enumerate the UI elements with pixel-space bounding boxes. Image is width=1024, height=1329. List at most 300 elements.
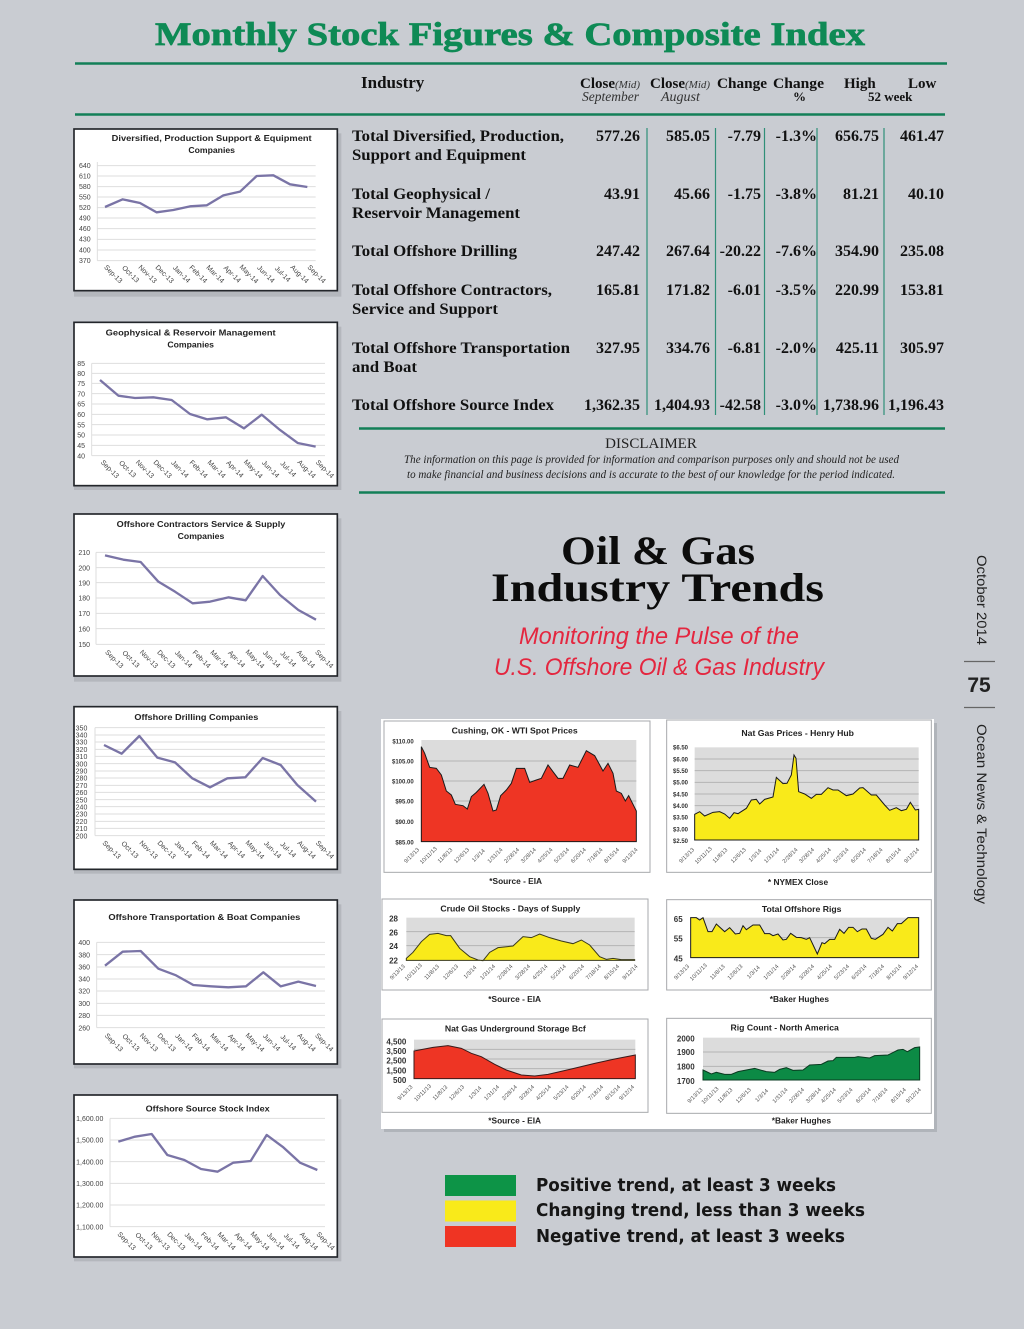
panel: offshore drilling chart: 280 <box>76 776 87 783</box>
chart: natural gas underground storage: 4,500 <box>386 1038 407 1047</box>
panel: geophysical chart: Nov-13 <box>134 459 155 480</box>
panel: diversified chart: 610 <box>79 174 91 181</box>
chart: Henry Hub natural gas prices: * NYMEX Close <box>768 877 828 887</box>
panel: diversified chart: Nov-13 <box>137 264 158 285</box>
chart: total offshore rigs: *Baker Hughes <box>770 994 829 1004</box>
panel: offshore source stock index chart: Jun-14 <box>265 1232 285 1252</box>
table row: transportation: 334.76 <box>666 340 710 357</box>
chart: total offshore rigs: 7/18/14 <box>868 964 886 981</box>
panel: offshore transportation chart: 380 <box>78 952 90 959</box>
panel: geophysical chart: 75 <box>77 381 85 388</box>
table row: transportation: and Boat <box>352 359 418 376</box>
chart: total offshore rigs: 1/31/14 <box>763 964 780 981</box>
chart: natural gas underground storage: 3/28/14 <box>518 1084 536 1102</box>
panel: offshore drilling chart: 220 <box>76 819 87 826</box>
chart: WTI spot prices: *Source - EIA <box>489 876 542 886</box>
chart: Henry Hub natural gas prices: 1/31/14 <box>763 847 781 865</box>
panel: offshore source stock index chart: Sep-14 <box>315 1231 336 1252</box>
panel: offshore drilling chart: Sep-14 <box>314 840 335 861</box>
panel: geophysical chart: 65 <box>77 402 85 409</box>
legend: Positive trend, at least 3 weeks <box>536 1175 836 1196</box>
chart: total offshore rigs: 1/3/14 <box>746 965 762 980</box>
chart: total offshore rigs: 3/28/14 <box>798 964 816 981</box>
chart: Henry Hub natural gas prices: 12/6/13 <box>730 847 748 865</box>
panel: geophysical chart: 45 <box>77 443 85 450</box>
panel: offshore source stock index chart: Apr-14 <box>233 1232 253 1252</box>
chart: Henry Hub natural gas prices: 9/13/13 <box>678 847 696 865</box>
table row: contractors: 171.82 <box>666 282 710 299</box>
chart: crude oil stocks: 4/25/14 <box>532 964 549 981</box>
chart: natural gas underground storage: 4/25/14 <box>535 1084 553 1102</box>
chart: WTI spot prices: 8/15/14 <box>603 847 621 865</box>
chart: total offshore rigs: 5/23/14 <box>833 964 851 981</box>
panel: offshore transportation chart: 340 <box>78 977 90 984</box>
panel: offshore transportation chart: 280 <box>78 1013 90 1020</box>
panel: offshore source stock index chart: 1,500.00 <box>76 1138 103 1145</box>
chart: natural gas underground storage: 8/15/14 <box>604 1084 622 1102</box>
panel: offshore transportation chart: Jul-14 <box>279 1034 297 1052</box>
chart: crude oil stocks: 7/18/14 <box>585 964 603 981</box>
chart: crude oil stocks <box>382 899 648 1004</box>
chart: natural gas underground storage: Nat Gas Underground Storage Bcf <box>445 1023 586 1033</box>
panel: offshore drilling chart: Mar-14 <box>208 840 229 861</box>
chart: Henry Hub natural gas prices: 9/12/14 <box>903 847 921 865</box>
panel: offshore transportation chart: Jun-14 <box>261 1033 281 1053</box>
panel: geophysical chart: Sep-13 <box>99 459 120 480</box>
table row: geophysical <box>352 186 944 222</box>
panel: offshore contractors chart: 170 <box>78 611 90 618</box>
chart: Henry Hub natural gas prices: $4.50 <box>673 792 689 798</box>
table row: diversified: Total Diversified, Production, <box>352 128 564 145</box>
panel: offshore transportation chart: Apr-14 <box>226 1033 246 1053</box>
panel: geophysical chart: Dec-13 <box>152 459 173 480</box>
chart: rig count North America: 4/25/14 <box>820 1087 838 1105</box>
chart: natural gas underground storage: 3,500 <box>386 1047 407 1056</box>
panel: trend charts background <box>381 719 937 1132</box>
chart: Henry Hub natural gas prices: $6.50 <box>673 746 689 752</box>
chart: Henry Hub natural gas prices: 6/20/14 <box>850 847 868 865</box>
panel: offshore drilling chart: 210 <box>76 826 87 833</box>
panel: offshore drilling chart: Jul-14 <box>279 841 297 860</box>
table row: geophysical: 40.10 <box>908 186 944 203</box>
chart: crude oil stocks: 10/11/13 <box>404 963 424 982</box>
chart: WTI spot prices: 9/13/13 <box>403 847 421 865</box>
chart: crude oil stocks: 9/12/14 <box>622 964 639 981</box>
chart: Henry Hub natural gas prices: 4/25/14 <box>815 847 833 865</box>
chart: rig count North America: 1/31/14 <box>772 1087 789 1105</box>
chart: rig count North America: 7/18/14 <box>872 1087 889 1105</box>
chart: natural gas underground storage: *Source - EIA <box>488 1116 541 1126</box>
panel: offshore contractors chart: Companies <box>178 531 225 541</box>
chart: total offshore rigs <box>667 900 931 1004</box>
table row: contractors: -3.5% <box>776 282 817 299</box>
panel: offshore source stock index chart: 1,600.00 <box>76 1116 103 1123</box>
chart: natural gas underground storage: 1,500 <box>386 1066 407 1075</box>
panel: diversified chart: May-14 <box>238 264 259 285</box>
panel: offshore contractors chart: Sep-13 <box>103 649 124 670</box>
heading: Oil & Gas Industry Trends: Oil & Gas <box>561 528 755 573</box>
chart: total offshore rigs: 10/11/13 <box>689 963 709 982</box>
chart: rig count North America: 9/12/14 <box>905 1087 923 1105</box>
chart: Henry Hub natural gas prices: $4.00 <box>673 804 689 810</box>
heading: Oil & Gas Industry Trends <box>491 528 824 610</box>
panel: offshore contractors chart: Sep-14 <box>313 649 334 670</box>
table row: drilling: -7.6% <box>776 243 817 260</box>
table row: geophysical: Total Geophysical / <box>352 186 491 203</box>
chart: crude oil stocks: 2/28/14 <box>497 964 514 981</box>
panel: diversified chart: Mar-14 <box>204 264 225 285</box>
chart: Henry Hub natural gas prices: $6.00 <box>673 757 689 763</box>
panel: offshore transportation chart: 320 <box>78 989 90 996</box>
chart: WTI spot prices: 10/11/13 <box>419 846 439 866</box>
table row: drilling: 235.08 <box>900 243 944 260</box>
chart: rig count North America: *Baker Hughes <box>772 1116 831 1126</box>
table row: drilling: -20.22 <box>720 243 761 260</box>
chart: Henry Hub natural gas prices: 2/28/14 <box>782 847 799 865</box>
chart: total offshore rigs: 45 <box>674 954 683 963</box>
panel: offshore drilling chart: 340 <box>76 733 87 740</box>
panel: diversified chart: Diversified, Production Support & Equipment <box>112 133 312 143</box>
panel: offshore source stock index chart: Jul-14 <box>282 1232 300 1251</box>
panel: offshore contractors chart: 150 <box>78 642 90 649</box>
panel: offshore contractors chart: Feb-14 <box>191 649 211 670</box>
chart: WTI spot prices: 5/23/14 <box>553 847 571 865</box>
disclaimer: to make financial and business decisions and is accurate to the best of our knowledge for the period indicated. <box>407 469 895 481</box>
table header: Change <box>717 76 767 92</box>
chart: total offshore rigs: 55 <box>674 934 683 943</box>
table row: diversified: 577.26 <box>596 128 640 145</box>
chart: rig count North America: Rig Count - North America <box>730 1022 839 1032</box>
table header: Change <box>773 76 824 92</box>
panel: diversified chart: 400 <box>79 247 91 254</box>
chart: total offshore rigs: 12/6/13 <box>727 964 744 981</box>
panel: offshore drilling chart: 230 <box>76 812 87 819</box>
chart: natural gas underground storage: 11/8/13 <box>432 1085 449 1102</box>
panel: geophysical chart: Mar-14 <box>206 459 226 480</box>
chart: WTI spot prices: 1/31/14 <box>487 847 504 865</box>
panel: diversified chart: Companies <box>188 145 235 155</box>
table header: September <box>582 90 640 105</box>
chart: WTI spot prices: $90.00 <box>395 820 414 826</box>
panel: offshore drilling chart: 300 <box>76 761 87 768</box>
chart: crude oil stocks: 1/3/14 <box>463 965 478 980</box>
chart: crude oil stocks: 8/15/14 <box>603 964 621 981</box>
side text: issue and page number: 75 <box>967 674 991 697</box>
table row: source index: 1,404.93 <box>654 397 710 414</box>
chart: crude oil stocks: 1/31/14 <box>479 964 497 981</box>
panel: offshore transportation chart: May-14 <box>244 1032 265 1054</box>
legend: Changing trend, less than 3 weeks <box>536 1200 865 1221</box>
legend <box>445 1175 865 1247</box>
chart: crude oil stocks: *Source - EIA <box>488 994 541 1004</box>
panel: offshore source stock index chart: 1,200.00 <box>76 1203 103 1210</box>
panel: offshore transportation chart: 300 <box>78 1001 90 1008</box>
panel: diversified chart: Aug-14 <box>289 264 310 285</box>
panel: offshore source stock index chart: 1,300.00 <box>76 1181 103 1188</box>
table row: geophysical: 45.66 <box>674 186 710 203</box>
panel: diversified chart: 460 <box>79 226 91 233</box>
table row: geophysical: 43.91 <box>604 186 640 203</box>
table row: source index: 1,362.35 <box>584 397 640 414</box>
table header <box>361 73 937 105</box>
table row: diversified <box>352 128 944 164</box>
table row: transportation: 425.11 <box>836 340 879 357</box>
panel: geophysical chart: 60 <box>77 412 85 419</box>
table row: contractors: 220.99 <box>835 282 879 299</box>
title: Monthly Stock Figures & Composite Index <box>155 17 866 53</box>
panel: offshore contractors chart: Jan-14 <box>173 650 193 670</box>
disclaimer <box>404 436 899 481</box>
panel: offshore drilling chart: Jan-14 <box>173 840 193 860</box>
table row: drilling: 267.64 <box>666 243 710 260</box>
chart: Henry Hub natural gas prices <box>667 720 931 887</box>
table row: source index: 1,196.43 <box>888 397 944 414</box>
panel: diversified chart: Feb-14 <box>187 264 208 285</box>
chart: rig count North America: 1/3/14 <box>755 1088 770 1104</box>
table row: source index: -3.0% <box>776 397 817 414</box>
panel: offshore drilling chart: Oct-13 <box>120 840 139 860</box>
panel: offshore drilling chart: 310 <box>76 754 87 761</box>
panel: offshore contractors chart: 180 <box>78 596 90 603</box>
chart: Henry Hub natural gas prices: $5.00 <box>673 781 689 787</box>
panel: diversified chart: Apr-14 <box>222 265 242 285</box>
chart: WTI spot prices: 7/18/14 <box>587 847 604 865</box>
chart: Henry Hub natural gas prices: Nat Gas Prices - Henry Hub <box>741 728 854 738</box>
panel: diversified chart: 370 <box>79 258 91 265</box>
panel: geophysical chart: Companies <box>167 339 214 349</box>
disclaimer: The information on this page is provided for information and comparison purposes only and should not be used <box>404 454 899 466</box>
panel: offshore source stock index chart: 1,400.00 <box>76 1159 103 1166</box>
subheading: U.S. Offshore Oil & Gas Industry <box>494 654 826 681</box>
panel: offshore transportation chart: Sep-14 <box>313 1032 334 1053</box>
chart: natural gas underground storage: 10/11/13 <box>414 1084 433 1103</box>
table row: source index: -42.58 <box>720 397 761 414</box>
table header: Close(Mid) <box>580 76 640 92</box>
chart: Henry Hub natural gas prices: 8/15/14 <box>885 847 903 865</box>
chart: WTI spot prices: 1/3/14 <box>471 848 487 864</box>
chart: natural gas underground storage: 1/3/14 <box>468 1086 483 1101</box>
chart: WTI spot prices <box>384 721 650 886</box>
panel: offshore transportation chart: Oct-13 <box>121 1033 140 1053</box>
chart: rig count North America: 11/8/13 <box>717 1087 734 1105</box>
chart: rig count North America: 8/15/14 <box>890 1087 908 1105</box>
panel: offshore drilling chart: 320 <box>76 747 87 754</box>
chart: total offshore rigs: 9/12/14 <box>902 964 920 981</box>
panel: offshore source stock index chart: Dec-13 <box>165 1231 186 1252</box>
panel: offshore drilling chart: Aug-14 <box>296 840 317 861</box>
table columns dividers <box>647 128 884 415</box>
chart: total offshore rigs: 4/25/14 <box>816 964 834 981</box>
chart: total offshore rigs: 6/20/14 <box>851 964 868 981</box>
chart: Henry Hub natural gas prices: 1/3/14 <box>748 848 763 864</box>
panel: offshore drilling chart: 260 <box>76 790 87 797</box>
panel: offshore contractors chart: Nov-13 <box>138 649 159 670</box>
panel: diversified chart: 490 <box>79 215 91 222</box>
panel: offshore source stock index chart: Mar-14 <box>216 1231 236 1252</box>
table row: diversified: -1.3% <box>776 128 817 145</box>
table header: August <box>660 90 701 105</box>
chart: crude oil stocks: 11/8/13 <box>424 964 441 981</box>
chart: natural gas underground storage: 6/20/14 <box>570 1084 588 1102</box>
chart: WTI spot prices: 6/20/14 <box>570 847 588 865</box>
panel: geophysical chart <box>74 322 341 490</box>
table row: transportation: Total Offshore Transportation <box>352 340 570 357</box>
chart: WTI spot prices: 11/8/13 <box>437 847 454 865</box>
chart: Henry Hub natural gas prices: $3.50 <box>673 816 689 822</box>
chart: rig count North America: 9/13/13 <box>687 1087 704 1105</box>
chart: WTI spot prices: 9/13/14 <box>622 847 639 865</box>
table row: drilling: 247.42 <box>596 243 640 260</box>
panel: offshore contractors chart: Dec-13 <box>155 649 176 670</box>
panel: offshore contractors chart: Apr-14 <box>226 650 246 670</box>
chart: rig count North America <box>667 1018 931 1126</box>
panel: diversified chart: 640 <box>79 163 91 170</box>
chart: total offshore rigs: 11/8/13 <box>709 964 727 981</box>
chart: rig count North America: 3/28/14 <box>805 1087 823 1105</box>
chart: Henry Hub natural gas prices: 3/28/14 <box>798 847 816 865</box>
panel: offshore contractors chart: Mar-14 <box>208 649 229 670</box>
chart: natural gas underground storage: 9/12/14 <box>618 1084 636 1102</box>
chart: rig count North America: 1900 <box>677 1048 695 1057</box>
table row: drilling: 354.90 <box>835 243 879 260</box>
heading: Oil & Gas Industry Trends: Industry Trends <box>491 565 824 610</box>
table row: diversified: Support and Equipment <box>352 147 527 164</box>
panel: offshore contractors chart: 190 <box>78 580 90 587</box>
chart: total offshore rigs: 65 <box>674 915 683 924</box>
panel: offshore drilling chart: Jun-14 <box>262 840 282 860</box>
panel: geophysical chart: Aug-14 <box>296 459 317 480</box>
panel: diversified chart: 430 <box>79 237 91 244</box>
table row: contractors <box>352 282 944 318</box>
chart: total offshore rigs: Total Offshore Rigs <box>762 904 842 914</box>
panel: offshore drilling chart <box>74 707 341 874</box>
table row: source index: Total Offshore Source Index <box>352 397 554 414</box>
panel: offshore transportation chart: Dec-13 <box>156 1033 177 1053</box>
chart: rig count North America: 5/23/14 <box>837 1087 854 1105</box>
subheading <box>494 623 826 681</box>
chart: WTI spot prices: 12/6/13 <box>453 847 471 865</box>
panel: offshore source stock index chart: Nov-13 <box>150 1231 171 1252</box>
panel: offshore source stock index chart <box>74 1095 341 1261</box>
panel: offshore drilling chart: Sep-13 <box>101 840 122 861</box>
disclaimer: DISCLAIMER <box>605 436 697 452</box>
panel: geophysical chart: 85 <box>77 361 85 368</box>
side text: issue and page number: Ocean News & Technology <box>974 724 990 904</box>
panel: diversified chart: 580 <box>79 184 91 191</box>
panel: geophysical chart: Jul-14 <box>279 460 297 479</box>
side text: issue and page number: October 2014 <box>974 555 990 645</box>
panel: diversified chart: 520 <box>79 205 91 212</box>
table row: contractors: 165.81 <box>596 282 640 299</box>
panel: offshore source stock index chart: Offshore Source Stock Index <box>146 1104 270 1114</box>
table row: drilling <box>352 243 944 260</box>
chart: crude oil stocks: 24 <box>389 942 399 951</box>
chart: crude oil stocks: 26 <box>389 929 399 938</box>
chart: Henry Hub natural gas prices: 5/23/14 <box>833 847 850 865</box>
panel: offshore drilling chart: Feb-14 <box>190 840 211 861</box>
chart: natural gas underground storage: 7/18/14 <box>587 1084 605 1102</box>
panel: offshore transportation chart: Offshore Transportation & Boat Companies <box>108 912 301 922</box>
panel: offshore contractors chart: Oct-13 <box>121 650 140 670</box>
chart: crude oil stocks: 28 <box>389 915 399 924</box>
chart: crude oil stocks: 9/13/13 <box>389 964 407 981</box>
panel: offshore source stock index chart: 1,100.00 <box>76 1224 103 1231</box>
chart: total offshore rigs: 9/13/13 <box>673 964 691 981</box>
panel: offshore transportation chart: Nov-13 <box>138 1033 159 1053</box>
panel: diversified chart: Sep-14 <box>306 264 327 285</box>
panel: offshore contractors chart: Jul-14 <box>279 650 297 669</box>
panel: geophysical chart: Jun-14 <box>260 460 280 480</box>
chart: natural gas underground storage: 2,500 <box>386 1057 407 1066</box>
chart: Henry Hub natural gas prices: 11/8/13 <box>712 847 729 865</box>
panel: offshore transportation chart: Feb-14 <box>190 1033 211 1053</box>
chart: Henry Hub natural gas prices: 10/11/13 <box>694 846 714 866</box>
panel: offshore contractors chart: Aug-14 <box>295 649 316 670</box>
panel: geophysical chart: Geophysical & Reservoir Management <box>106 327 276 337</box>
chart: crude oil stocks: 5/23/14 <box>550 964 568 981</box>
chart: rig count North America: 1700 <box>677 1077 695 1086</box>
panel: geophysical chart: Sep-14 <box>314 459 335 480</box>
chart: WTI spot prices: $85.00 <box>395 841 414 847</box>
panel: offshore contractors chart: 160 <box>78 626 90 633</box>
panel: geophysical chart: Apr-14 <box>225 460 244 480</box>
panel: offshore transportation chart <box>74 900 341 1068</box>
chart: natural gas underground storage: 1/31/14 <box>483 1084 501 1102</box>
panel: offshore transportation chart: Aug-14 <box>296 1032 317 1053</box>
chart: natural gas underground storage: 9/13/13 <box>397 1084 414 1102</box>
table row: geophysical: -3.8% <box>776 186 817 203</box>
panel: diversified chart: Sep-13 <box>102 264 123 285</box>
panel: offshore source stock index chart: Sep-13 <box>116 1231 137 1252</box>
table row: transportation: 305.97 <box>900 340 944 357</box>
chart: rig count North America: 2/28/14 <box>788 1087 806 1105</box>
chart: rig count North America: 10/11/13 <box>701 1086 720 1106</box>
panel: geophysical chart: 80 <box>77 371 85 378</box>
panel: geophysical chart: Feb-14 <box>188 459 208 480</box>
panel: offshore contractors chart <box>74 514 341 682</box>
panel: offshore transportation chart: 400 <box>78 940 90 947</box>
panel: offshore contractors chart: Jun-14 <box>261 650 281 670</box>
chart: WTI spot prices: $105.00 <box>392 759 414 765</box>
panel: geophysical chart: Oct-13 <box>117 460 137 480</box>
table row: transportation: -2.0% <box>776 340 817 357</box>
table row: diversified: -7.79 <box>728 128 761 145</box>
chart: crude oil stocks: 6/20/14 <box>568 964 586 981</box>
panel: diversified chart: 550 <box>79 194 91 201</box>
chart: natural gas underground storage: 12/6/13 <box>448 1084 466 1102</box>
chart: natural gas underground storage: 5/23/14 <box>553 1084 570 1102</box>
chart: Henry Hub natural gas prices: 7/18/14 <box>867 847 884 865</box>
panel: offshore drilling chart: 270 <box>76 783 87 790</box>
panel: offshore contractors chart: 210 <box>78 550 90 557</box>
subheading: Monitoring the Pulse of the <box>519 623 799 650</box>
chart: WTI spot prices: Cushing, OK - WTI Spot Prices <box>452 726 578 736</box>
table row: geophysical: Reservoir Management <box>352 205 521 222</box>
panel: offshore drilling chart: 250 <box>76 797 87 804</box>
panel: offshore transportation chart: Jan-14 <box>173 1033 193 1053</box>
legend: Negative trend, at least 3 weeks <box>536 1226 845 1247</box>
panel: diversified chart <box>74 129 341 297</box>
panel: offshore transportation chart: Sep-13 <box>103 1032 124 1053</box>
table header: % <box>793 89 806 104</box>
table header: Close(Mid) <box>650 76 710 92</box>
panel: offshore drilling chart: 290 <box>76 769 87 776</box>
chart: rig count North America: 6/20/14 <box>855 1087 873 1105</box>
chart: WTI spot prices: $95.00 <box>395 799 414 805</box>
panel: diversified chart: Jun-14 <box>255 265 275 285</box>
panel: offshore source stock index chart: Jan-14 <box>183 1232 203 1252</box>
table row: transportation <box>352 340 944 376</box>
